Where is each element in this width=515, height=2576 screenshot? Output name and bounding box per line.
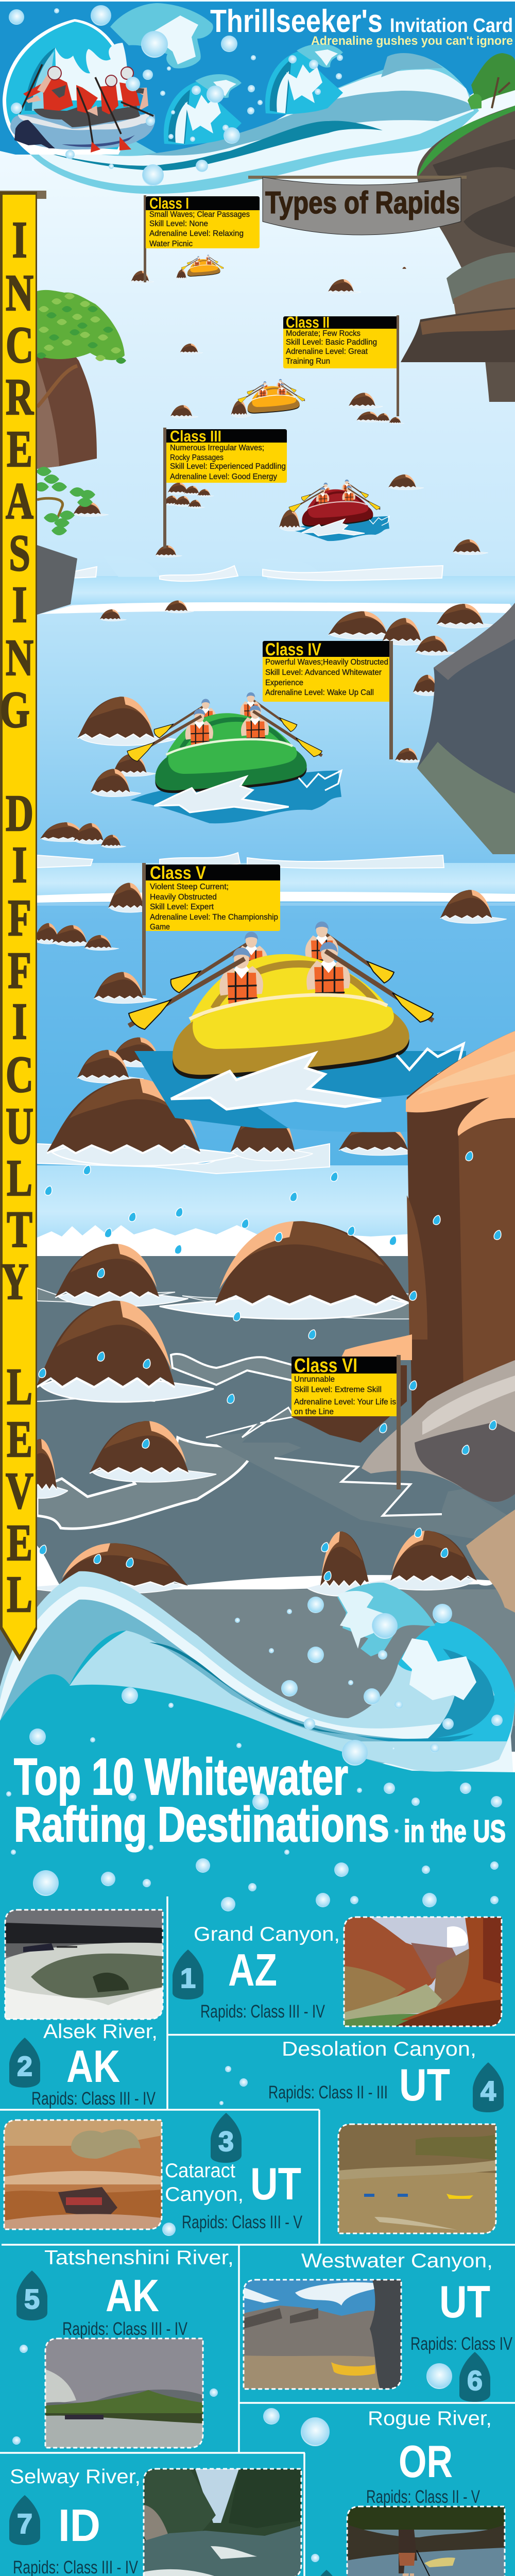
raft: class III red (279, 480, 389, 541)
left rock and tree (33, 290, 126, 535)
sign: class IV: Experience (265, 679, 303, 687)
sign: class VI (291, 1355, 401, 1489)
left vertical banner: increasing difficulty level: N (6, 264, 33, 322)
teal panel background (0, 1772, 515, 2576)
sign: class I: Water Picnic (149, 240, 193, 248)
rapids class: Rapids: Class III - IV (31, 2089, 156, 2109)
place name line 2: Canyon, (165, 2183, 244, 2206)
sign: class V: Heavily Obstructed (150, 893, 217, 902)
left vertical banner: increasing difficulty level: I (12, 836, 27, 894)
sign: class VI: on the Line (294, 1408, 334, 1416)
badge 2 (9, 2038, 40, 2088)
left vertical banner: increasing difficulty level: I (12, 576, 27, 634)
section dividers (0, 1896, 515, 2576)
badge 1: 1 (180, 1963, 196, 1994)
state: UT (250, 2158, 301, 2209)
badge 5: 5 (24, 2284, 40, 2315)
state: AK (66, 2041, 120, 2092)
destination 1: Grand Canyon (173, 1917, 502, 2026)
sign: class III: Adrenaline Level: Good Energy (170, 472, 277, 481)
drops (39, 1151, 501, 1581)
header large wave behind raft (3, 3, 213, 155)
sign: class V: Adrenaline Level: The Championship (150, 913, 278, 922)
badge 5 (16, 2270, 47, 2320)
sign: class III: Rocky Passages (170, 453, 224, 462)
badge 2: 2 (17, 2051, 32, 2082)
destination 8: Rogue River (311, 2408, 505, 2576)
sign: class V: Skill Level: Expert (150, 903, 214, 911)
heading: top 10 destinations: Top 10 Whitewater (14, 1748, 348, 1806)
header curled waves (164, 44, 343, 145)
badge 6: 6 (467, 2365, 483, 2396)
header title: Thrillseeker's (210, 4, 383, 39)
left vertical banner: increasing difficulty level: S (9, 524, 30, 582)
right brown cliff lower (291, 1031, 515, 1443)
header raft with crew (10, 64, 155, 152)
heading: top 10 destinations (14, 1748, 506, 1852)
destination 5: Tatshenshini River (16, 2247, 234, 2448)
left vertical banner: increasing difficulty level: F (8, 942, 31, 999)
waterfall band 2 (37, 853, 515, 906)
place name: Rogue River, (368, 2408, 492, 2430)
rapids class: Rapids: Class III - IV (200, 2002, 325, 2022)
lighter water areas in grey river (37, 1288, 515, 1726)
left vertical banner: increasing difficulty level: D (6, 785, 33, 842)
left vertical banner: increasing difficulty level (0, 191, 46, 1662)
state: UT (439, 2276, 490, 2327)
badge 3 (211, 2113, 242, 2163)
raft: class I orange (176, 255, 224, 280)
badge 8 (311, 2570, 342, 2576)
badge 6 (459, 2352, 490, 2402)
left vertical banner: increasing difficulty level: L (7, 1358, 32, 1416)
sign: class III: Numerous Irregular Waves; (170, 444, 264, 452)
sign: class VI: Adrenaline Level: Your Life is (294, 1398, 396, 1406)
destination 6: Westwater Canyon (244, 2250, 512, 2402)
sign: class V: Class V (150, 863, 207, 883)
left vertical banner: increasing difficulty level: T (7, 1201, 32, 1259)
rapids class: Rapids: Class II - III (268, 2082, 388, 2103)
place name: Westwater Canyon, (301, 2250, 493, 2272)
sign: class IV: Adrenaline Level: Wake Up Call (265, 688, 374, 697)
heading: top 10 destinations: Rafting Destinations (14, 1797, 389, 1852)
banner: types of rapids: Types of Rapids (265, 185, 460, 220)
tail of wave over panel (360, 1741, 507, 1772)
left vertical banner: increasing difficulty level: U (6, 1097, 33, 1155)
sign: class VI: Skill Level: Extreme Skill (294, 1385, 382, 1394)
destination 4: Desolation Canyon (268, 2038, 504, 2233)
waterfall band 3 (37, 1144, 413, 1256)
state: ID (58, 2500, 100, 2551)
left vertical banner: increasing difficulty level: E (7, 1411, 32, 1468)
header title: Adrenaline gushes you can't ignore (311, 34, 513, 48)
place name: Grand Canyon, (194, 1923, 340, 1945)
sign: class IV: Skill Level: Advanced Whitewater (265, 668, 382, 677)
right grey boulders (362, 1360, 515, 1613)
sign: class I: Skill Level: None (149, 219, 208, 228)
badge 4: 4 (480, 2076, 496, 2107)
sign: class VI: Unrunnable (294, 1375, 335, 1384)
destination 3: Cataract Canyon (4, 2113, 302, 2232)
sign: class II: Skill Level: Basic Paddling (286, 338, 377, 347)
left vertical banner: increasing difficulty level: I (12, 993, 27, 1050)
waterfall band 1 (37, 556, 515, 614)
sign: class II: Moderate; Few Rocks (286, 329, 360, 338)
place name: Cataract (165, 2160, 235, 2182)
sign: class III (163, 427, 287, 548)
rapids class: Rapids: Class III - V (182, 2212, 302, 2232)
sign: class III: Skill Level: Experienced Paddling (170, 462, 286, 471)
badge 4 (473, 2062, 504, 2112)
rapids class: Rapids: Class III - IV (62, 2319, 187, 2339)
place name: Alsek River, (43, 2021, 158, 2043)
sign: class V: Game (150, 923, 170, 931)
right grey cliff mid (417, 603, 515, 854)
left vertical banner: increasing difficulty level: N (6, 629, 33, 687)
header title (210, 4, 513, 48)
left vertical banner: increasing difficulty level: R (6, 368, 34, 426)
rocks in the river (18, 267, 507, 1596)
left vertical banner: increasing difficulty level: A (6, 472, 33, 530)
bottom teal wave (0, 1571, 515, 1803)
badge 7 (9, 2495, 40, 2545)
sign: class II: Class II (286, 313, 330, 331)
sign: class III: Class III (170, 427, 221, 445)
left vertical banner: increasing difficulty level: L (7, 1149, 32, 1207)
banner: types of rapids (248, 176, 467, 235)
sign: class I: Class I (149, 194, 189, 212)
badge 7: 7 (17, 2509, 32, 2539)
badge 1 (173, 1950, 203, 1999)
sign: class II: Training Run (286, 357, 330, 366)
left vertical banner: increasing difficulty level: E (7, 420, 32, 478)
raft: class IV green (127, 692, 341, 823)
left vertical banner: increasing difficulty level: E (7, 1514, 32, 1572)
sign: class V: Violent Steep Current; (150, 883, 229, 891)
sign: class VI: Class VI (294, 1355, 357, 1377)
left vertical banner: increasing difficulty level: F (8, 889, 31, 947)
state: AZ (228, 1944, 277, 1995)
destination 2: Alsek River (5, 1910, 163, 2109)
sign: class IV: Class IV (265, 640, 321, 659)
background: sky and rapid water (0, 0, 515, 1257)
left vertical banner: increasing difficulty level: Y (1, 1253, 29, 1311)
sign: class I: Adrenaline Level: Relaxing (149, 229, 244, 238)
sign: class I: Small Waves; Clear Passages (149, 210, 250, 219)
left vertical banner: increasing difficulty level: V (6, 1462, 33, 1520)
left vertical banner: increasing difficulty level: G (0, 681, 30, 739)
left vertical banner: increasing difficulty level: C (6, 316, 33, 374)
state: UT (399, 2059, 450, 2110)
raft: class II orange (231, 379, 305, 417)
state: OR (399, 2436, 453, 2487)
left vertical banner: increasing difficulty level: L (7, 1566, 32, 1623)
header big swoosh wave (20, 53, 479, 194)
raft: class V yellow (129, 922, 466, 1132)
sign: class V (142, 863, 280, 995)
sign: class II: Adrenaline Level: Great (286, 347, 368, 356)
header blue water (0, 2, 515, 155)
background: grey lower river (0, 1256, 515, 1752)
place name: Selway River, (10, 2466, 141, 2488)
left vertical banner: increasing difficulty level: I (12, 211, 27, 269)
sign: class I (144, 194, 260, 282)
place name: Desolation Canyon, (282, 2038, 476, 2060)
sign: class IV (263, 640, 393, 759)
left grey rock (37, 545, 77, 615)
place name: Tatshenshini River, (44, 2247, 234, 2269)
badge 3: 3 (218, 2126, 234, 2157)
left vertical banner: increasing difficulty level: C (6, 1046, 33, 1104)
destination 7: Selway River (9, 2466, 301, 2576)
state: AK (106, 2270, 159, 2321)
header cliff with tree (401, 53, 515, 402)
sign: class IV: Powerful Waves;Heavily Obstructed (265, 658, 388, 667)
sign: class II (283, 313, 399, 416)
